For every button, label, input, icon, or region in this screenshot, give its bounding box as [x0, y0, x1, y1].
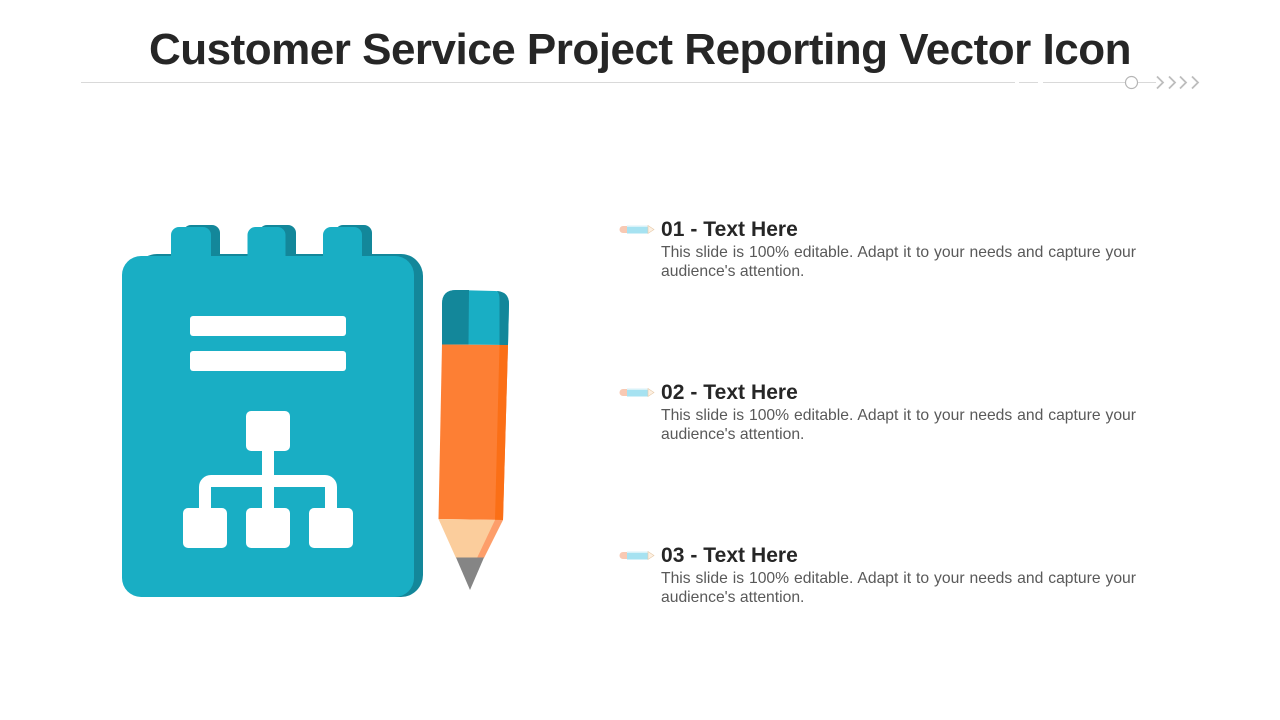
pencil body: [438, 344, 508, 520]
pencil graphite: [456, 558, 484, 590]
description 02: This slide is 100% editable. Adapt it to your needs and capture your audience's attention.: [661, 407, 1136, 443]
notebook back shadow: [135, 225, 423, 597]
description 01: This slide is 100% editable. Adapt it to your needs and capture your audience's attention.: [661, 244, 1136, 280]
heading 02: 02 - Text Here: [661, 381, 798, 404]
list item 03: [620, 544, 1136, 606]
text lines: [190, 316, 346, 371]
pencil wood tip: [438, 519, 503, 558]
list item 01: [620, 218, 1136, 280]
notebook front cover: [122, 227, 414, 597]
description 03: This slide is 100% editable. Adapt it to your needs and capture your audience's attention.: [661, 570, 1136, 606]
pencil eraser cap: [442, 290, 509, 345]
bullet: small pencil: [620, 388, 654, 397]
bullet: small pencil: [620, 225, 654, 234]
title: Customer Service Project Reporting Vector Icon: [149, 25, 1131, 74]
bullet: small pencil: [620, 551, 654, 560]
heading 03: 03 - Text Here: [661, 544, 798, 567]
list item 02: [620, 381, 1136, 443]
heading 01: 01 - Text Here: [661, 218, 798, 241]
hierarchy diagram: [183, 411, 353, 548]
